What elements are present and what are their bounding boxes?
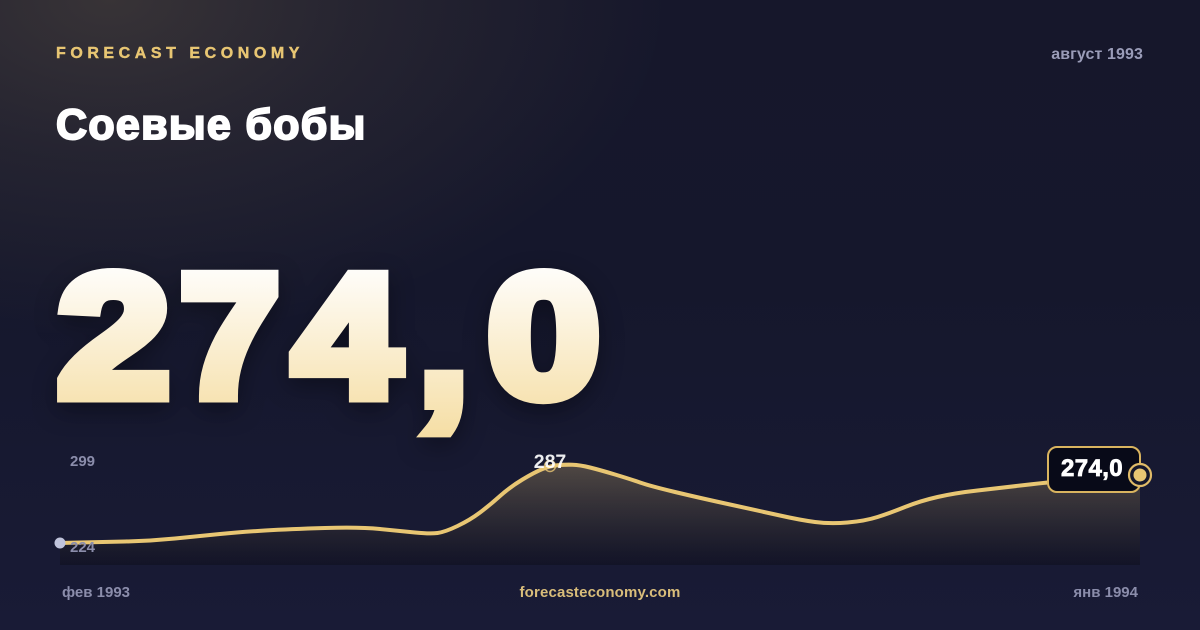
peak value: 287 <box>534 451 566 473</box>
end point marker <box>1129 464 1151 486</box>
main value: 7 <box>180 239 280 433</box>
axis max: 299 <box>70 453 95 470</box>
brand label: FORECAST ECONOMY <box>56 45 304 62</box>
price line <box>60 465 1140 543</box>
title: Соевые бобы <box>56 101 367 149</box>
value callout <box>1048 447 1140 492</box>
main value: 0 <box>488 238 600 433</box>
axis min: 224 <box>70 539 96 556</box>
main value: 4 <box>293 238 400 433</box>
start point <box>54 538 66 548</box>
source site: forecasteconomy.com <box>520 584 680 601</box>
area fill <box>60 465 1140 565</box>
main value: 2 <box>58 238 170 433</box>
peak marker <box>544 460 556 472</box>
main value: , <box>419 243 468 441</box>
start date: фев 1993 <box>62 584 130 601</box>
value callout: 274,0 <box>1061 455 1123 482</box>
date label: август 1993 <box>1051 46 1143 63</box>
end date: янв 1994 <box>1073 584 1138 601</box>
